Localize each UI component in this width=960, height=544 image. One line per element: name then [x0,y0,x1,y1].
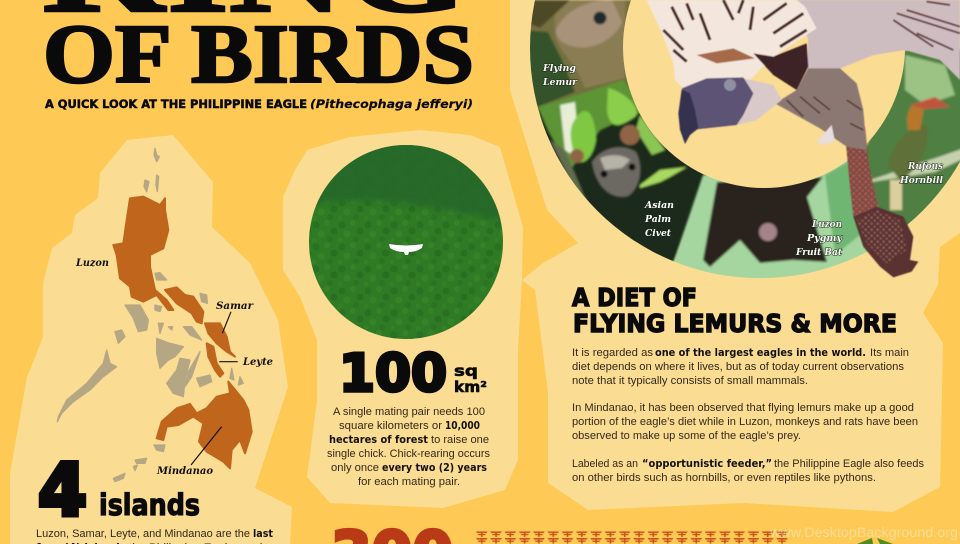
map labels: Luzon [75,258,109,269]
diet text: Its main [870,347,909,359]
watermark: www.DesktopBackground.org [769,525,958,540]
other islands in grey [57,148,243,482]
icon: white eagle silhouette [389,244,423,255]
panel: map [10,135,292,544]
photo labels: Hornbill [899,175,943,186]
stat: 100 sq km: sq [454,362,478,380]
stat: 4 islands: islands [99,488,200,522]
map labels [75,258,273,477]
diet text: “opportunistic feeder,” [642,458,772,470]
map labels: Leyte [242,357,273,368]
diet heading: FLYING LEMURS & MORE [573,309,897,338]
Samar [205,323,235,357]
diet text [572,347,924,484]
diet text: note that it typically consists of small mammals. [572,375,808,387]
forest text: every two (2) years [382,462,487,474]
eagle wing and body [797,0,960,80]
diet text: observed to make up some of the eagle’s prey. [572,430,801,442]
photo labels: Asian [644,200,674,211]
diet text: Labeled as an [572,458,638,470]
forest text [327,406,490,488]
eagle eye [724,79,736,91]
diet text: diet depends on where it lives, but as of today current observations [572,361,904,373]
photo: luzon pygmy fruit bat [672,160,868,278]
eagle cheek [737,78,782,125]
diet text: the Philippine Eagle also feeds [774,458,924,470]
panel: forest territory [283,130,523,508]
subtitle: (Pithecophaga jefferyi) [310,97,473,111]
photo labels: Flying [542,63,576,74]
photo: flying lemur [525,0,635,112]
map labels: Samar [216,301,254,312]
photo labels: Civet [645,228,672,239]
icon row: small birds [475,531,790,544]
wing stripes [893,2,960,50]
diet text: one of the largest eagles in the world. [655,347,866,359]
philippine eagle illustration [647,0,960,277]
forest text: square kilometers or [339,420,442,432]
eagle underbody and thigh [775,68,867,150]
stat: 4 islands: 4 [38,448,87,532]
stat: 100 sq km: km² [454,378,487,396]
forest text: for each mating pair. [358,476,460,488]
crest brown band [697,48,755,63]
diet heading [572,283,897,338]
photo labels: Rufous [907,161,944,172]
photo labels: Lemur [542,77,578,88]
stat: 100 sq km: 100 [339,344,447,404]
map labels: Mindanao [156,466,213,477]
Leyte [207,343,223,377]
eagle beak [678,89,698,144]
forest text: 10,000 [445,420,480,432]
diet text: In Mindanao, it has been observed that flying lemurs make up a good [572,402,914,414]
subtitle [45,97,473,111]
panel: diet [510,0,960,512]
photo labels: Luzon [811,219,842,230]
eagle head and body [647,0,960,150]
eagle crest [647,0,817,88]
highlighted islands in brown [113,197,252,468]
diet heading: A DIET OF [572,283,697,312]
islands text [36,528,273,544]
crest dark rear [753,43,808,90]
Mindanao [157,382,252,468]
eagle face [682,77,753,129]
stat: 4 islands [38,448,200,532]
subtitle: A QUICK LOOK AT THE PHILIPPINE EAGLE [45,97,307,111]
photo: asian palm civet [538,80,710,265]
eagle leg and foot [845,127,918,277]
Luzon [113,197,173,310]
diet text: portion of the eagle’s diet while in Luzon, monkeys and rats have been [572,416,918,428]
islands text: last [253,528,273,540]
forest text: only once [331,462,379,474]
title: OF BIRDS [43,8,474,101]
photo labels: Fruit Bat [795,247,843,258]
photo ring: prey animals [525,0,960,300]
diet text: It is regarded as [572,347,654,359]
map of the Philippines [57,148,252,482]
Bicol region [165,287,203,323]
forest text: to raise one [431,434,489,446]
forest photo with eagle [309,145,503,339]
forest text: single chick. Chick-rearing occurs [327,448,490,460]
photo labels: Palm [644,214,671,225]
forest text: A single mating pair needs 100 [333,406,485,418]
photo labels: Pygmy [806,233,843,244]
icon: green leaves [857,538,893,544]
forest text: hectares of forest [329,434,428,446]
islands text: Luzon, Samar, Leyte, and Mindanao are the [36,528,250,540]
diet text: on other birds such as hornbills, or even reptiles like pythons. [572,472,876,484]
photo: rufous hornbill [866,49,960,225]
leader lines [191,312,238,465]
photo labels [542,63,944,258]
